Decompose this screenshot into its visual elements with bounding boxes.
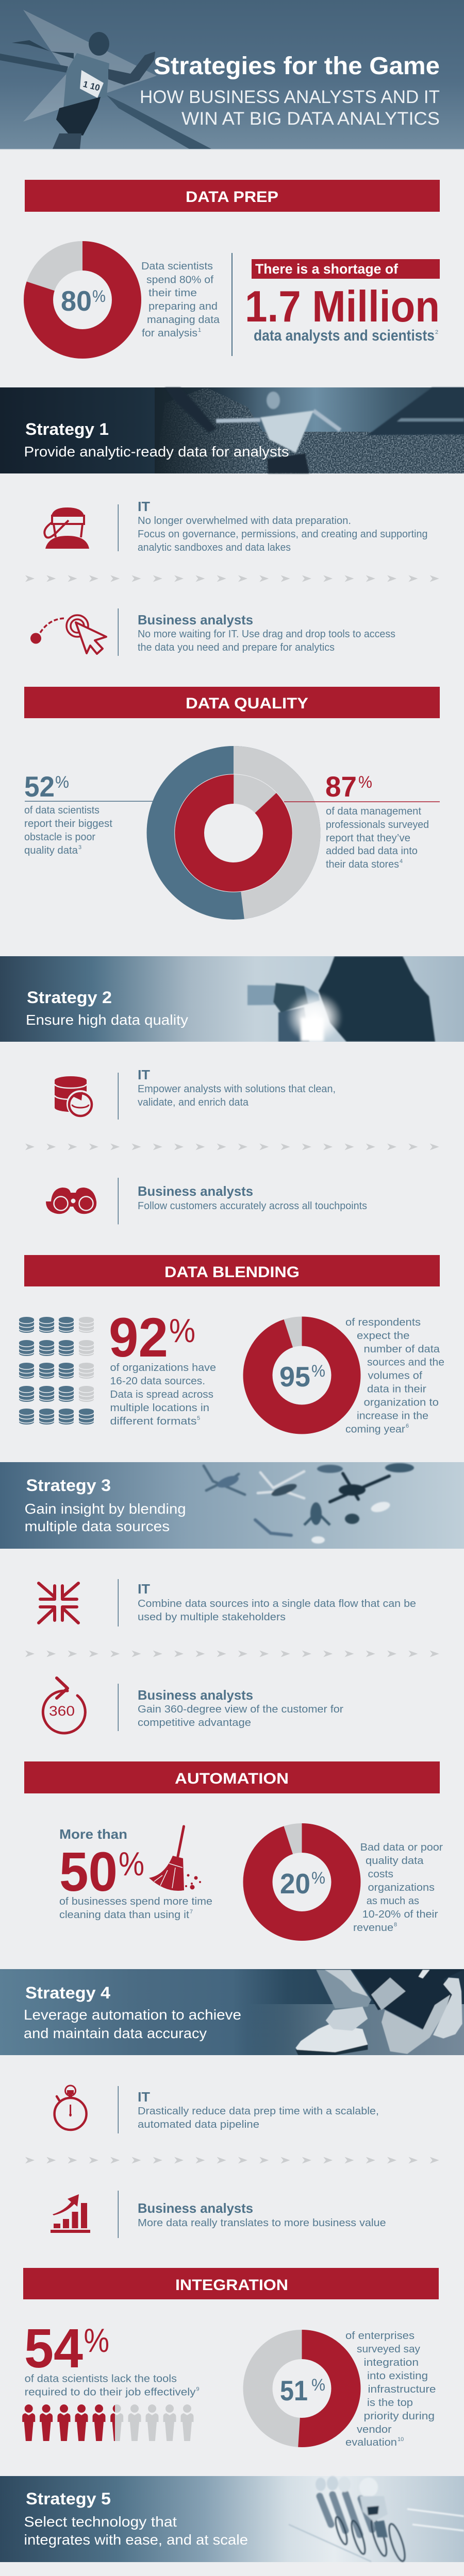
- stat: more than 50%: %: [119, 1845, 144, 1883]
- donut chart: 80%: 80: [61, 285, 92, 317]
- strategy 3 IT text: Combine data sources into a single data flow that can be: [138, 1598, 416, 1609]
- donut chart: 20%: %: [311, 1869, 325, 1887]
- icon: database refresh: [55, 1076, 94, 1118]
- text block: 95% of respondents: sources and the: [367, 1356, 444, 1368]
- text block: 95% of respondents: expect the: [357, 1330, 409, 1342]
- text block: 95% of respondents: 6: [406, 1423, 409, 1429]
- text block: enterprises integration: integration: [364, 2357, 419, 2368]
- stat: 52%: 3: [78, 844, 81, 851]
- stat: 52%: [24, 770, 153, 856]
- stat: 87%: report that they’ve: [326, 832, 410, 844]
- text block: enterprises integration: 10: [397, 2436, 404, 2443]
- text block: enterprises integration: of enterprises: [345, 2330, 415, 2342]
- icon: bucket: [44, 507, 89, 549]
- stat: 87%: %: [358, 773, 372, 791]
- section banner: data blending: DATA BLENDING: [164, 1264, 300, 1281]
- strategy 3 banner: multiple data sources: [25, 1518, 170, 1534]
- strategy 4 banner: Strategy 4: [25, 1984, 110, 2002]
- icon: growth chart: [51, 2194, 90, 2233]
- text block: enterprises integration: into existing: [367, 2370, 428, 2382]
- text block: data scientists spend 80%: for analysis: [142, 327, 197, 339]
- stat: 54%: %: [84, 2321, 109, 2359]
- text block: 95% of respondents: data in their: [367, 1383, 426, 1395]
- strategy 1 IT text: Focus on governance, permissions, and creating and supporting: [138, 528, 428, 540]
- strategy 3 business analysts text: Business analysts: [138, 1687, 253, 1703]
- strategy 4 banner: and maintain data accuracy: [24, 2025, 207, 2041]
- stat: 92%: of organizations have: [110, 1362, 216, 1374]
- pictogram: people 54%: [22, 2404, 193, 2441]
- stat: 52%: 52: [24, 770, 55, 803]
- strategy 4 banner: [0, 1969, 464, 2055]
- stat: 52%: of data scientists: [24, 804, 100, 816]
- strategy 3 IT text: IT: [138, 1581, 150, 1597]
- strategy 2 IT text: Empower analysts with solutions that clean,: [138, 1083, 336, 1095]
- text block: bad data costs: 10-20% of their: [362, 1908, 438, 1920]
- stat: 52%: quality data: [24, 844, 78, 856]
- photo: athlete drinking: [247, 956, 435, 1043]
- icon: converging arrows: [39, 1583, 78, 1623]
- text block: bad data costs: organizations: [368, 1882, 435, 1893]
- stat: 87%: added bad data into: [326, 845, 418, 857]
- photo: skydivers: [204, 1463, 414, 1544]
- text block: bad data costs: [353, 1841, 443, 1934]
- stat: 54%: 54: [24, 2317, 83, 2379]
- callout: 1.7 million shortage: data analysts and scientists: [254, 327, 435, 344]
- hero: runner photo: 1 10: [82, 79, 101, 93]
- text block: 95% of respondents: of respondents: [345, 1316, 421, 1328]
- donut chart: 51%: [258, 2344, 346, 2433]
- photo: track cyclists: [289, 2476, 464, 2563]
- text block: data scientists spend 80%: spend 80% of: [146, 274, 213, 285]
- donut chart: 95%: %: [311, 1362, 325, 1380]
- text block: bad data costs: as much as: [367, 1895, 419, 1907]
- strategy 2 IT text: validate, and enrich data: [138, 1096, 249, 1108]
- stat: 92%: multiple locations in: [110, 1402, 209, 1414]
- photo: runner tying shoe: [295, 1970, 463, 2055]
- text block: data scientists spend 80%: their time: [148, 287, 197, 299]
- donut chart: 80%: %: [92, 287, 106, 306]
- strategy 5 banner: Select technology that: [24, 2514, 177, 2530]
- stat: 52%: %: [55, 773, 69, 791]
- text block: 95% of respondents: coming year: [345, 1423, 405, 1435]
- strategy 4 IT text: automated data pipeline: [138, 2119, 259, 2130]
- icon: stopwatch: [55, 2086, 87, 2130]
- strategy 3 banner: [0, 1462, 464, 1549]
- stat: 87%: of data management: [326, 805, 421, 817]
- stat: 87%: [284, 770, 440, 870]
- text block: bad data costs: 8: [394, 1922, 397, 1928]
- text block: bad data costs: costs: [368, 1868, 393, 1880]
- strategy 1 banner: Provide analytic-ready data for analysts: [24, 444, 289, 460]
- stat: 92%: different formats: [110, 1415, 197, 1427]
- text block: 95% of respondents: [345, 1316, 444, 1435]
- text block: 95% of respondents: number of data: [364, 1343, 440, 1355]
- text block: bad data costs: Bad data or poor: [360, 1841, 443, 1853]
- double donut chart: [161, 760, 306, 906]
- stat: more than 50%: [59, 1826, 212, 1921]
- stat: 92%: %: [169, 1312, 195, 1349]
- callout: 1.7 million shortage: [245, 259, 440, 344]
- stat: more than 50%: 50: [59, 1840, 118, 1903]
- donut chart: 20%: 20: [280, 1868, 310, 1900]
- donut chart: 95%: 95: [279, 1361, 310, 1393]
- icon grid: database pictogram 92%: [19, 1317, 94, 1425]
- section banner: automation: [24, 1761, 440, 1793]
- donut chart: 51%: %: [311, 2376, 325, 2394]
- section banner: data blending: [24, 1255, 440, 1286]
- strategy 5 banner: Strategy 5: [26, 2489, 111, 2508]
- stat: 92%: 92: [109, 1306, 168, 1368]
- stat: 92%: 16-20 data sources.: [110, 1375, 205, 1387]
- strategy 2 business analysts text: Business analysts: [138, 1183, 253, 1199]
- strategy 1 business analysts text: [138, 612, 395, 653]
- strategy 3 banner: Gain insight by blending: [25, 1501, 186, 1517]
- strategy 1 banner: [0, 387, 464, 473]
- section banner: integration: [23, 2268, 439, 2299]
- strategy 4 business analysts text: [138, 2200, 386, 2229]
- icon: 360 view: [43, 1678, 85, 1733]
- strategy 4 IT text: [138, 2089, 379, 2130]
- strategy 1 banner: Strategy 1: [25, 420, 109, 438]
- strategy 2 IT text: IT: [138, 1067, 150, 1082]
- text block: data scientists spend 80%: Data scientists: [141, 260, 213, 272]
- strategy 3 business analysts text: Gain 360-degree view of the customer for: [138, 1703, 343, 1715]
- callout: 1.7 million shortage: 1.7 Million: [245, 282, 440, 331]
- text block: 95% of respondents: increase in the: [357, 1410, 428, 1422]
- text block: data scientists spend 80%: 1: [198, 327, 201, 333]
- stat: more than 50%: More than: [59, 1826, 127, 1842]
- strategy 5 banner: [0, 2476, 464, 2563]
- stat: 92%: 5: [197, 1415, 200, 1421]
- text block: enterprises integration: [345, 2330, 436, 2448]
- hero: runner photo: [0, 10, 211, 149]
- strategy 4 business analysts text: Business analysts: [138, 2200, 253, 2216]
- donut chart: 51%: 51: [280, 2375, 308, 2406]
- strategy 3 IT text: used by multiple stakeholders: [138, 1611, 286, 1623]
- donut chart: 20%: [258, 1838, 346, 1926]
- stat: 87%: 4: [400, 858, 403, 865]
- strategy 2 business analysts text: Follow customers accurately across all touchpoints: [138, 1200, 367, 1212]
- strategy 1 business analysts text: the data you need and prepare for analytics: [138, 641, 335, 653]
- subtitle: HOW BUSINESS ANALYSTS AND IT: [140, 87, 440, 107]
- strategy 1 IT text: [138, 499, 428, 553]
- text block: enterprises integration: surveyed say: [357, 2343, 421, 2355]
- section banner: automation: AUTOMATION: [175, 1770, 289, 1787]
- strategy 3 business analysts text: competitive advantage: [138, 1717, 251, 1728]
- strategy 1 IT text: IT: [138, 499, 150, 514]
- stat: 52%: report their biggest: [24, 818, 112, 829]
- section banner: data prep: DATA PREP: [186, 189, 278, 206]
- section banner: data quality: [24, 687, 440, 718]
- strategy 4 banner: Leverage automation to achieve: [24, 2007, 241, 2023]
- subtitle: WIN AT BIG DATA ANALYTICS: [181, 109, 440, 129]
- text block: data scientists spend 80%: [141, 260, 220, 339]
- text block: 95% of respondents: organization to: [364, 1396, 439, 1409]
- stat: 92%: Data is spread across: [110, 1388, 213, 1400]
- text block: bad data costs: revenue: [353, 1922, 393, 1934]
- hero header: [0, 0, 464, 149]
- donut chart: 95%: [258, 1331, 346, 1419]
- strategy 3 business analysts text: [138, 1687, 343, 1728]
- strategy 2 banner: Ensure high data quality: [26, 1012, 188, 1028]
- stat: more than 50%: 7: [190, 1909, 193, 1915]
- strategy 3 IT text: [138, 1581, 416, 1623]
- text block: bad data costs: quality data: [366, 1855, 424, 1867]
- text block: enterprises integration: vendor: [357, 2424, 392, 2435]
- icon: click target: [30, 615, 106, 654]
- strategy 1 IT text: No longer overwhelmed with data preparation.: [138, 515, 351, 527]
- strategy 2 banner: Strategy 2: [27, 988, 112, 1007]
- stat: 92%: [109, 1306, 216, 1427]
- stat: 54%: required to do their job effectively: [25, 2386, 196, 2398]
- stat: 54%: 9: [196, 2386, 200, 2393]
- text block: enterprises integration: infrastructure: [368, 2383, 436, 2395]
- section banner: data prep: [25, 180, 440, 212]
- callout: 1.7 million shortage: 2: [435, 329, 438, 335]
- text block: data scientists spend 80%: preparing and: [148, 300, 218, 312]
- strategy 4 IT text: Drastically reduce data prep time with a scalable,: [138, 2105, 379, 2117]
- text block: enterprises integration: priority during: [364, 2410, 435, 2422]
- strategy 1 business analysts text: No more waiting for IT. Use drag and drop tools to access: [138, 628, 395, 640]
- stat: 52%: obstacle is poor: [24, 831, 95, 843]
- stat: 54%: [24, 2317, 200, 2398]
- strategy 1 IT text: analytic sandboxes and data lakes: [138, 541, 291, 553]
- icon: binoculars: [46, 1188, 96, 1214]
- stat: more than 50%: of businesses spend more time: [59, 1895, 212, 1907]
- text block: enterprises integration: is the top: [367, 2397, 413, 2409]
- callout: 1.7 million shortage: There is a shortage of: [255, 261, 399, 277]
- subtitle: [140, 87, 440, 129]
- photo: stadium roof and player: [165, 387, 464, 473]
- section banner: integration: INTEGRATION: [175, 2277, 288, 2294]
- stat: 87%: professionals surveyed: [326, 819, 429, 831]
- icon: broom: [149, 1826, 201, 1891]
- title: Strategies for the Game: [154, 53, 440, 80]
- text block: enterprises integration: evaluation: [345, 2436, 397, 2448]
- text block: 95% of respondents: volumes of: [368, 1369, 422, 1382]
- section banner: data quality: DATA QUALITY: [186, 695, 308, 712]
- donut chart: 80%: [38, 256, 127, 344]
- strategy 5 banner: integrates with ease, and at scale: [24, 2532, 248, 2548]
- strategy 4 IT text: IT: [138, 2089, 150, 2105]
- text block: data scientists spend 80%: managing data: [147, 314, 220, 326]
- strategy 2 banner: [0, 956, 464, 1043]
- stat: more than 50%: cleaning data than using it: [59, 1909, 189, 1921]
- stat: 87%: 87: [325, 770, 357, 803]
- strategy 4 business analysts text: More data really translates to more business value: [138, 2217, 386, 2229]
- stat: 87%: their data stores: [326, 858, 399, 870]
- strategy 2 business analysts text: [138, 1183, 367, 1212]
- strategy 3 banner: Strategy 3: [26, 1476, 111, 1495]
- stat: 54%: of data scientists lack the tools: [25, 2373, 177, 2384]
- strategy 1 business analysts text: Business analysts: [138, 612, 253, 628]
- strategy 2 IT text: [138, 1067, 336, 1108]
- icon: 360 view: 360: [49, 1703, 75, 1719]
